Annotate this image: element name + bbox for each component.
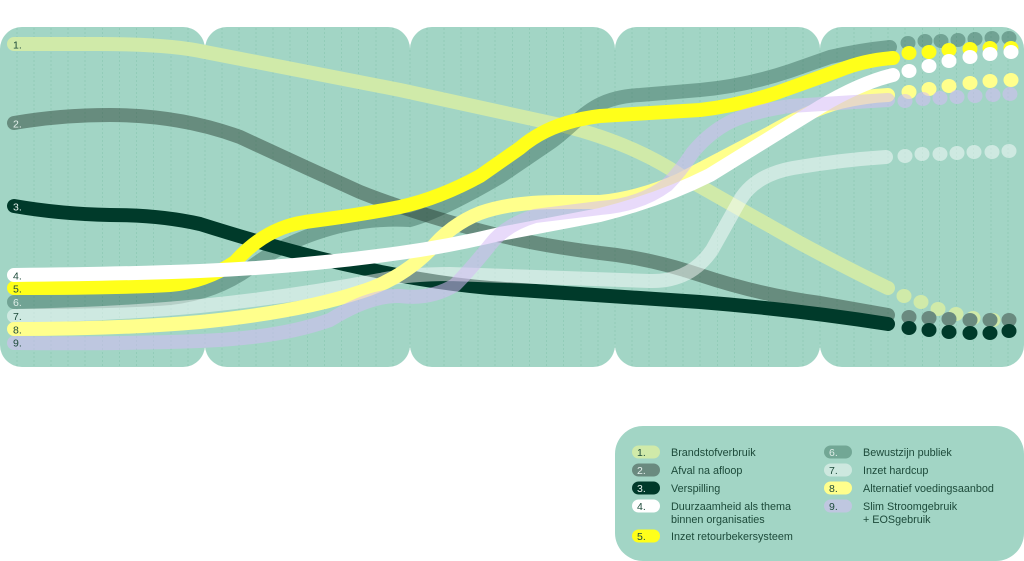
legend item 3 — [632, 482, 720, 495]
legend panel — [615, 426, 1024, 561]
legend item 4: Duurzaamheid als thema — [671, 501, 791, 513]
line 7: Inzet hardcup: 7. — [13, 311, 22, 323]
line 4: Duurzaamheid als thema binnen organisaties: 4. — [13, 270, 22, 282]
line 5: Inzet retourbekersysteem — [13, 41, 1018, 296]
legend item 2 — [632, 464, 742, 477]
legend item 4: binnen organisaties — [671, 514, 765, 526]
legend item 8 — [824, 482, 994, 495]
line 1: Brandstofverbruik — [13, 40, 1000, 327]
legend item 1: Brandstofverbruik — [671, 447, 756, 459]
line 5: Inzet retourbekersysteem: 5. — [13, 284, 22, 296]
line 4: Duurzaamheid als thema binnen organisaties — [13, 45, 1018, 282]
legend item 9: 9. — [829, 501, 838, 513]
line 6: Bewustzijn publiek: 6. — [13, 297, 22, 309]
line 8: Alternatief voedingsaanbod — [13, 73, 1018, 336]
legend item 5: Inzet retourbekersysteem — [671, 531, 793, 543]
legend item 3: Verspilling — [671, 483, 720, 495]
legend item 7 — [824, 464, 928, 477]
legend item 8: 8. — [829, 483, 838, 495]
legend item 2: 2. — [637, 465, 646, 477]
line 1: Brandstofverbruik: 1. — [13, 40, 22, 52]
line 6: Bewustzijn publiek — [13, 31, 1016, 309]
legend item 6 — [824, 446, 952, 459]
legend item 9 — [824, 500, 958, 526]
line 3: Verspilling: 3. — [13, 202, 22, 214]
legend item 1 — [632, 446, 756, 459]
legend item 6: Bewustzijn publiek — [863, 447, 952, 459]
legend item 7: 7. — [829, 465, 838, 477]
legend item 4: 4. — [637, 501, 646, 513]
line 7: Inzet hardcup — [13, 144, 1016, 323]
line 8: Alternatief voedingsaanbod: 8. — [13, 324, 22, 336]
legend item 3: 3. — [637, 483, 646, 495]
legend item 6: 6. — [829, 447, 838, 459]
legend item 9: + EOSgebruik — [863, 514, 931, 526]
legend item 8: Alternatief voedingsaanbod — [863, 483, 994, 495]
legend item 2: Afval na afloop — [671, 465, 742, 477]
legend item 5 — [632, 530, 793, 543]
line 9: Slim Stroomgebruik + EOSgebruik: 9. — [13, 338, 22, 350]
line 9: Slim Stroomgebruik + EOSgebruik — [13, 87, 1018, 350]
legend item 5: 5. — [637, 531, 646, 543]
line 2: Afval na afloop — [13, 115, 1016, 327]
line 2: Afval na afloop: 2. — [13, 118, 22, 130]
legend item 4 — [632, 500, 791, 526]
legend item 7: Inzet hardcup — [863, 465, 928, 477]
line 3: Verspilling — [13, 202, 1016, 340]
legend item 1: 1. — [637, 447, 646, 459]
legend item 9: Slim Stroomgebruik — [863, 501, 958, 513]
panel: chart background columns — [0, 27, 1024, 367]
